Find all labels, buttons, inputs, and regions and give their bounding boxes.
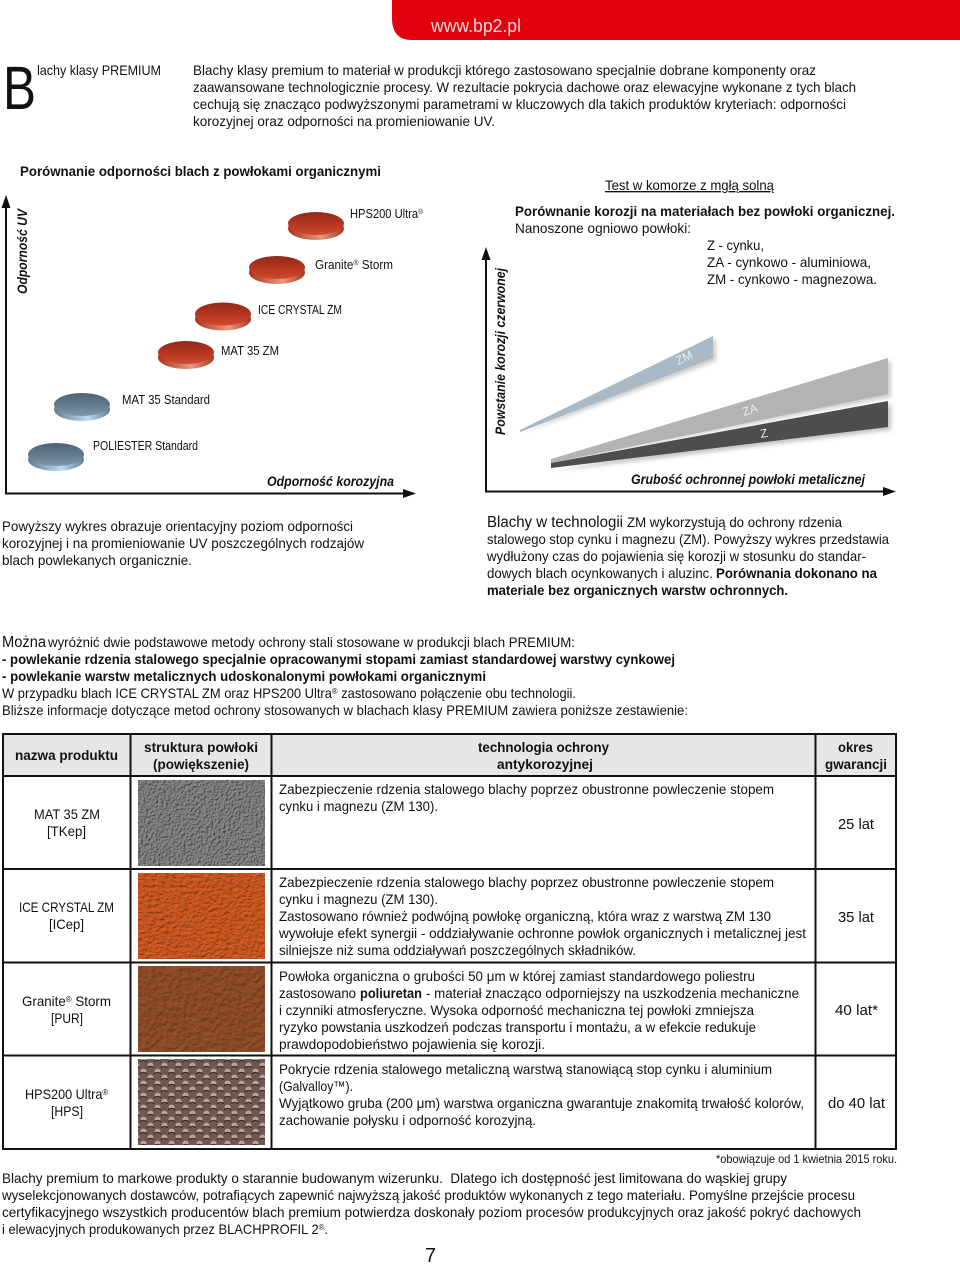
wedge: ZM: ZM: [673, 348, 695, 368]
table header row: antykorozyjnej: [497, 757, 593, 772]
table header row: gwarancji: [825, 757, 887, 772]
table row: Granite Storm: prawdopodobieństwo pojawienia się korozji.: [279, 1037, 545, 1052]
label: Granite Storm: Granite® Storm: [315, 258, 393, 272]
text block: protection methods: W przypadku blach ICE CRYSTAL ZM oraz HPS200 Ultra® zastosowano połączenie obu technologii.: [2, 686, 576, 701]
table row: Granite Storm: 40 lat*: [835, 1002, 878, 1019]
x axis label: Odporność korozyjna: [267, 473, 394, 489]
table row: MAT 35 ZM: 25 lat: [838, 816, 875, 833]
table row: ICE CRYSTAL ZM: [19, 873, 875, 959]
table row: ICE CRYSTAL ZM: [ICep]: [49, 917, 84, 932]
table row: HPS200 Ultra: zachowanie połysku i odporność korozyjną.: [279, 1113, 536, 1128]
label: MAT 35 ZM: MAT 35 ZM: [221, 344, 279, 358]
label: ICE CRYSTAL ZM: ICE CRYSTAL ZM: [258, 303, 342, 317]
caption: salt chamber test: Test w komorze z mgłą solną: [605, 178, 774, 193]
table row: MAT 35 ZM: Zabezpieczenie rdzenia stalowego blachy poprzez obustronne powleczenie stopem: [279, 782, 774, 797]
table row: Granite Storm: Granite® Storm: [22, 994, 111, 1009]
text block: chart 2 description: Porównania dokonano na: [716, 566, 877, 581]
table row: HPS200 Ultra: [HPS]: [51, 1104, 83, 1119]
disk: Granite Storm: [249, 256, 305, 284]
text block: protection methods: - powlekanie rdzenia stalowego specjalnie opracowanymi stopami zamiast standardowej warstwy cynkowej: [2, 652, 675, 667]
heading: Blachy klasy PREMIUM: lachy klasy PREMIUM: [37, 63, 161, 78]
intro text block: cechują się znacząco podwyższonymi parametrami w kluczowych dla takich produktów kryteriach: odporności: [193, 97, 846, 112]
table row: ICE CRYSTAL ZM: ICE CRYSTAL ZM: [19, 900, 114, 915]
table row: Granite Storm: i czynniki atmosferyczne. Wysoka odporność mechaniczna tej powłoki zmniejsza: [279, 1003, 754, 1018]
legend text: hot-dip coatings: [515, 204, 895, 287]
table row: ICE CRYSTAL ZM: 35 lat: [838, 909, 875, 926]
label: HPS200 Ultra: HPS200 Ultra®: [350, 206, 423, 221]
table row: HPS200 Ultra: do 40 lat: [828, 1095, 886, 1112]
text block: closing paragraph: Blachy premium to markowe produkty o starannie budowanym wizerunku. Dlatego ich dostępność jest limitowana do wąskiej grupy: [2, 1171, 787, 1186]
intro text block: korozyjnej oraz odporności na promieniowanie UV.: [193, 114, 495, 129]
table row: HPS200 Ultra: Wyjątkowo gruba (200 μm) warstwa organiczna gwarantuje znakomitą trwałość kolorów,: [279, 1096, 804, 1111]
table row: Granite Storm: Powłoka organiczna o grubości 50 μm w której zamiast standardowego poliestru: [279, 969, 755, 984]
text block: protection methods: wyróżnić dwie podstawowe metody ochrony stali stosowane w produkcji blach PREMIUM:: [47, 635, 575, 650]
table row: MAT 35 ZM: [TKep]: [47, 824, 86, 839]
table row: Granite Storm: ryzyko powstania uszkodzeń podczas transportu i montażu, a w efekcie redukuje: [279, 1020, 756, 1035]
chart title: organic coatings comparison: Porównanie odporności blach z powłokami organicznymi: [20, 164, 381, 179]
table row: ICE CRYSTAL ZM: Zastosowano również podwójną powłokę organiczną, która wraz z warstwą ZM 130: [279, 909, 771, 924]
table row: MAT 35 ZM: MAT 35 ZM: [34, 807, 100, 822]
table header row: [3, 734, 896, 776]
y axis label: Odporność UV: [14, 208, 30, 294]
table header row: struktura powłoki: [144, 740, 258, 755]
text block: closing paragraph: i elewacyjnych produkowanych przez BLACHPROFIL 2®.: [2, 1222, 328, 1237]
table row: ICE CRYSTAL ZM: cynku i magnezu (ZM 130).: [279, 892, 438, 907]
legend text: hot-dip coatings: ZM - cynkowo - magnezowa.: [707, 272, 877, 287]
table header row: technologia ochrony: [478, 740, 609, 755]
disk: MAT 35 ZM: [158, 341, 214, 369]
table row: Granite Storm: - materiał znacząco odporniejszy na uszkodzenia mechaniczne: [426, 986, 799, 1001]
table: product comparison: [3, 734, 896, 1149]
x axis arrow: [485, 487, 896, 496]
table row: HPS200 Ultra: (Galvalloy™).: [279, 1079, 353, 1094]
legend text: hot-dip coatings: Nanoszone ogniowo powłoki:: [515, 221, 691, 236]
text block: closing paragraph: [1, 1171, 861, 1237]
y axis arrow: [2, 195, 10, 494]
wedge: Z: [551, 401, 891, 471]
wedge: ZM: [520, 336, 716, 433]
text block: chart 1 description: blach powlekanych organicznie.: [2, 553, 192, 568]
table row: Granite Storm: [PUR]: [51, 1011, 83, 1026]
text block: chart 2 description: Blachy w technologii: [487, 514, 623, 531]
text block: chart 1 description: [2, 519, 364, 568]
text block: protection methods: - powlekanie warstw metalicznych udoskonalonymi powłokami organicznymi: [2, 669, 486, 684]
table row: Granite Storm: poliuretan: [360, 986, 422, 1001]
text block: protection methods: Bliższe informacje dotyczące metod ochrony stosowanych w blachach klasy PREMIUM zawiera poniższe zestawienie:: [2, 703, 688, 718]
disk: MAT 35 Standard: [54, 393, 110, 421]
text block: chart 1 description: Powyższy wykres obrazuje orientacyjny poziom odporności: [2, 519, 353, 534]
label: POLIESTER Standard: POLIESTER Standard: [93, 439, 198, 453]
intro text block: [193, 63, 856, 129]
heading: Blachy klasy PREMIUM: [3, 54, 161, 122]
text block: chart 2 description: stalowego stop cynku i magnezu (ZM). Powyższy wykres przedstawia: [487, 532, 889, 547]
text block: chart 2 description: materiale bez organicznych warstw ochronnych.: [487, 583, 788, 598]
table header row: (powiększenie): [153, 757, 249, 772]
wedge: Z: Z: [759, 426, 769, 441]
text block: closing paragraph: wyselekcjonowanych dostawców, potrafiących zapewnić najwyższą jakość produktów wykonanych z tego materiału. Pomyślne przejście procesu: [1, 1188, 855, 1203]
disk: HPS200 Ultra: [288, 212, 344, 240]
table row: HPS200 Ultra: HPS200 Ultra®: [25, 1087, 108, 1102]
text block: chart 1 description: korozyjnej i na promieniowanie UV poszczególnych rodzajów: [2, 536, 364, 551]
intro text block: Blachy klasy premium to materiał w produkcji którego zastosowano specjalnie dobrane komponenty oraz: [193, 63, 816, 78]
text block: protection methods: Można: [2, 634, 46, 651]
table row: Granite Storm: zastosowano: [279, 986, 356, 1001]
header: red tab with website: www.bp2.pl: [430, 16, 521, 36]
text block: chart 2 description: wydłużony czas do pojawienia się korozji w stosunku do standar-: [486, 549, 866, 564]
table row: MAT 35 ZM: cynku i magnezu (ZM 130).: [279, 799, 438, 814]
y axis arrow: [482, 247, 490, 492]
heading: Blachy klasy PREMIUM: B: [3, 54, 36, 122]
table row: HPS200 Ultra: [25, 1059, 886, 1145]
header: red tab with website: [392, 0, 960, 40]
legend text: hot-dip coatings: Porównanie korozji na materiałach bez powłoki organicznej.: [515, 204, 895, 219]
table row: ICE CRYSTAL ZM: silniejsze niż suma oddziaływań poszczególnych składników.: [279, 943, 636, 958]
wedge: ZA: [551, 358, 891, 463]
footnote: *obowiązuje od 1 kwietnia 2015 roku.: [716, 1152, 897, 1166]
table header row: nazwa produktu: [15, 748, 118, 763]
table row: HPS200 Ultra: Pokrycie rdzenia stalowego metaliczną warstwą stanowiącą stop cynku i aluminium: [279, 1062, 772, 1077]
text block: chart 2 description: ZM wykorzystują do ochrony rdzenia: [627, 515, 842, 530]
x axis label: Grubość ochronnej powłoki metalicznej: [631, 471, 866, 487]
table row: ICE CRYSTAL ZM: Zabezpieczenie rdzenia stalowego blachy poprzez obustronne powleczenie stopem: [279, 875, 774, 890]
text block: closing paragraph: certyfikacyjnego wszystkich producentów blach premium potwierdza doskonały poziom procesów produkcyjnych oraz jakość pokryć dachowych: [2, 1205, 861, 1220]
disk: ICE CRYSTAL ZM: [195, 302, 251, 330]
legend text: hot-dip coatings: ZA - cynkowo - aluminiowa,: [707, 255, 871, 270]
chart: UV vs corrosion resistance: [2, 195, 423, 498]
wedge: ZA: ZA: [741, 401, 760, 419]
intro text block: zaawansowane technologicznie procesy. W rezultacie pokrycia dachowe oraz elewacyjne wykonane z tych blach: [193, 80, 856, 95]
x axis arrow: [5, 489, 416, 498]
disk: POLIESTER Standard: [28, 443, 84, 471]
y axis label: Powstanie korozji czerwonej: [492, 267, 508, 435]
chart: red corrosion vs metallic coating thickness: [482, 247, 896, 496]
table row: Granite Storm: [22, 966, 878, 1052]
legend text: hot-dip coatings: Z - cynku,: [707, 238, 764, 253]
label: MAT 35 Standard: MAT 35 Standard: [122, 393, 210, 407]
table header row: okres: [838, 740, 873, 755]
table row: MAT 35 ZM: [34, 780, 875, 866]
text block: protection methods: [2, 634, 688, 718]
text block: chart 2 description: dowych blach ocynkowanych i aluzinc.: [487, 566, 713, 581]
table row: ICE CRYSTAL ZM: wywołuje efekt synergii - oddziaływanie ochronne powłok organicznych i metalicznej jest: [278, 926, 806, 941]
text block: chart 2 description: [486, 514, 889, 598]
